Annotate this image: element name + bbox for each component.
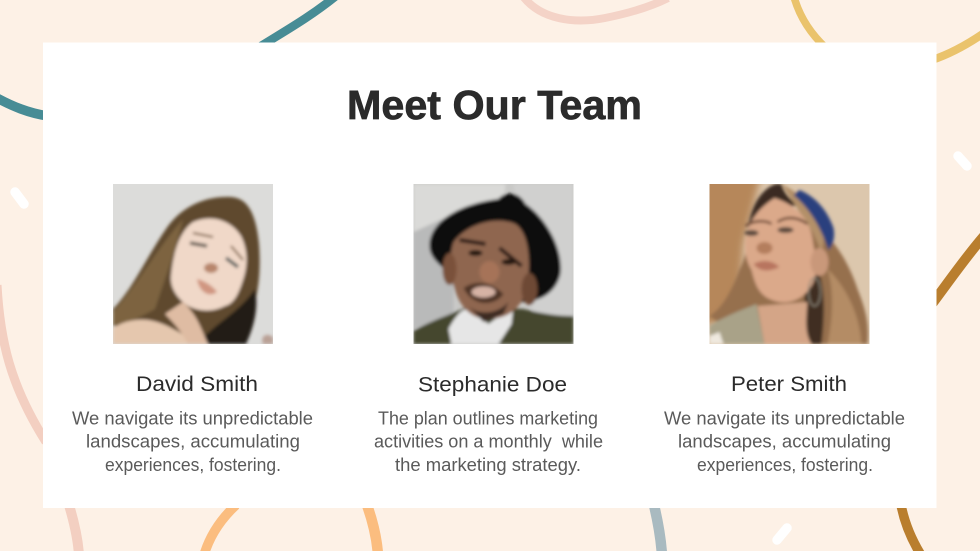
description: landscapes, accumulating (678, 432, 891, 452)
team member: David Smith (72, 184, 313, 475)
description: experiences, fostering. (697, 455, 873, 475)
description: We navigate its unpredictable (72, 408, 313, 428)
team member: Stephanie Doe (374, 184, 603, 475)
description (664, 408, 905, 475)
photo: woman with long brown hair (113, 184, 273, 344)
team member: Peter Smith (664, 174, 905, 475)
description (374, 408, 603, 475)
main white panel (43, 42, 936, 508)
white dashes (15, 156, 967, 540)
description: experiences, fostering. (105, 455, 281, 475)
description: landscapes, accumulating (86, 432, 300, 452)
description (72, 408, 313, 475)
description: the marketing strategy. (395, 455, 581, 475)
description: activities on a monthly while (374, 432, 603, 452)
name: David Smith (136, 373, 258, 396)
title: Meet Our Team (347, 82, 642, 128)
name: Stephanie Doe (418, 374, 567, 397)
description: We navigate its unpredictable (664, 408, 905, 428)
name: Peter Smith (731, 373, 847, 396)
description: The plan outlines marketing (378, 408, 598, 428)
photo: man in black hat (414, 184, 574, 344)
photo: woman with curly hair and blue headband (710, 184, 870, 344)
